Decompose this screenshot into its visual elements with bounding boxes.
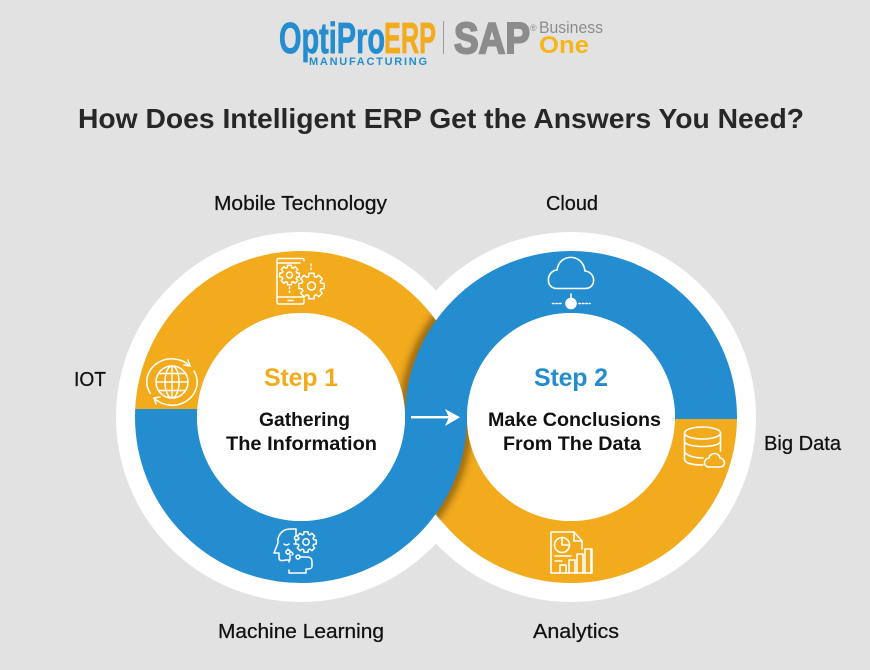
step 2 text: Step 2 (534, 364, 608, 392)
step 2 text: Make Conclusions (488, 409, 661, 431)
logo: Business (539, 18, 603, 37)
left ring orange arc (135, 251, 436, 409)
icon: machine learning head (274, 529, 316, 573)
label: IOT: IOT (74, 369, 106, 391)
right ring blue arc (405, 251, 737, 419)
label: Mobile Technology: Mobile Technology (214, 193, 387, 215)
logo: MANUFACTURING (309, 56, 427, 68)
icon: cloud (548, 257, 594, 308)
label: Big Data: Big Data (764, 433, 842, 455)
logo (279, 14, 603, 68)
step 2 text: From The Data (503, 433, 641, 455)
step 1 text (226, 364, 377, 455)
label: Analytics: Analytics (533, 621, 619, 643)
label: Cloud: Cloud (546, 193, 598, 215)
logo: ERP (384, 14, 436, 63)
step 1 text: The Information (226, 433, 377, 455)
logo: ® (530, 23, 537, 33)
interlocking rings (116, 232, 756, 602)
step 2 text (488, 364, 661, 455)
logo: OptiPro (279, 14, 385, 63)
icon: big data (684, 427, 724, 467)
label: Machine Learning: Machine Learning (218, 621, 384, 643)
step 1 text: Gathering (259, 409, 350, 431)
icon: mobile gears (277, 258, 324, 304)
step 1 text: Step 1 (264, 364, 338, 392)
icon: globe (147, 359, 197, 405)
logo: One (539, 32, 589, 59)
left ring blue arc (135, 409, 467, 583)
right ring orange arc (436, 419, 737, 583)
title: How Does Intelligent ERP Get the Answers You Need? (78, 103, 804, 134)
arrow (411, 409, 460, 426)
logo: SAP (454, 14, 530, 63)
icon: analytics report (551, 532, 592, 573)
